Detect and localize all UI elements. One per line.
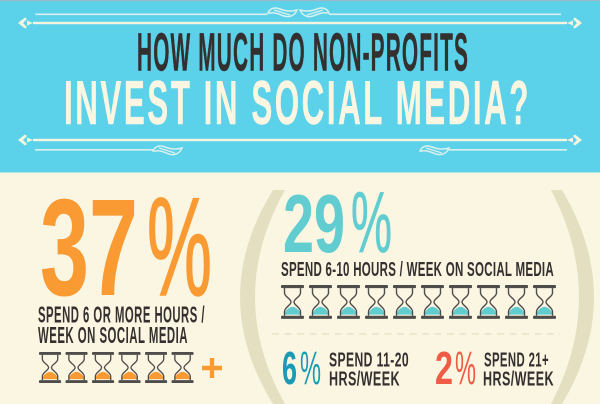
stat block: 6 percent: SPEND 11-20 <box>329 348 409 372</box>
icons: ten teal hourglasses <box>281 285 556 319</box>
stat block: 2 percent: SPEND 21+ <box>484 348 549 372</box>
caption: 37 percent <box>38 302 205 348</box>
stat: 29 percent: % <box>351 175 392 271</box>
stat: 37 percent: 37 <box>40 171 138 325</box>
icons: six orange hourglasses <box>39 352 194 383</box>
panel: 37 percent: SPEND 6 OR MORE HOURS / <box>38 302 205 328</box>
stat: 29 percent: 29 <box>283 177 345 270</box>
stat block: 6 percent: % <box>300 341 321 394</box>
stat block: 6 percent: 6 <box>282 342 297 394</box>
top ornament <box>18 8 582 28</box>
left parenthesis <box>240 190 285 404</box>
stat: 37 percent: % <box>147 168 212 325</box>
right parenthesis <box>551 190 594 404</box>
header banner <box>0 0 600 172</box>
stat block: 6 percent <box>282 341 409 394</box>
bottom ornament <box>18 134 582 155</box>
caption: 37 percent: WEEK ON SOCIAL MEDIA <box>38 322 188 348</box>
panel: 37 percent <box>38 168 222 383</box>
stat block: 2 percent: 2 <box>435 342 453 394</box>
stat block: 2 percent: % <box>455 341 476 394</box>
icon: plus sign <box>202 358 222 378</box>
stat block: 6 percent: HRS/WEEK <box>329 368 400 390</box>
panel: 29 percent <box>272 175 560 334</box>
stat block: 2 percent: HRS/WEEK <box>483 368 554 390</box>
stat block: 2 percent <box>435 341 554 394</box>
